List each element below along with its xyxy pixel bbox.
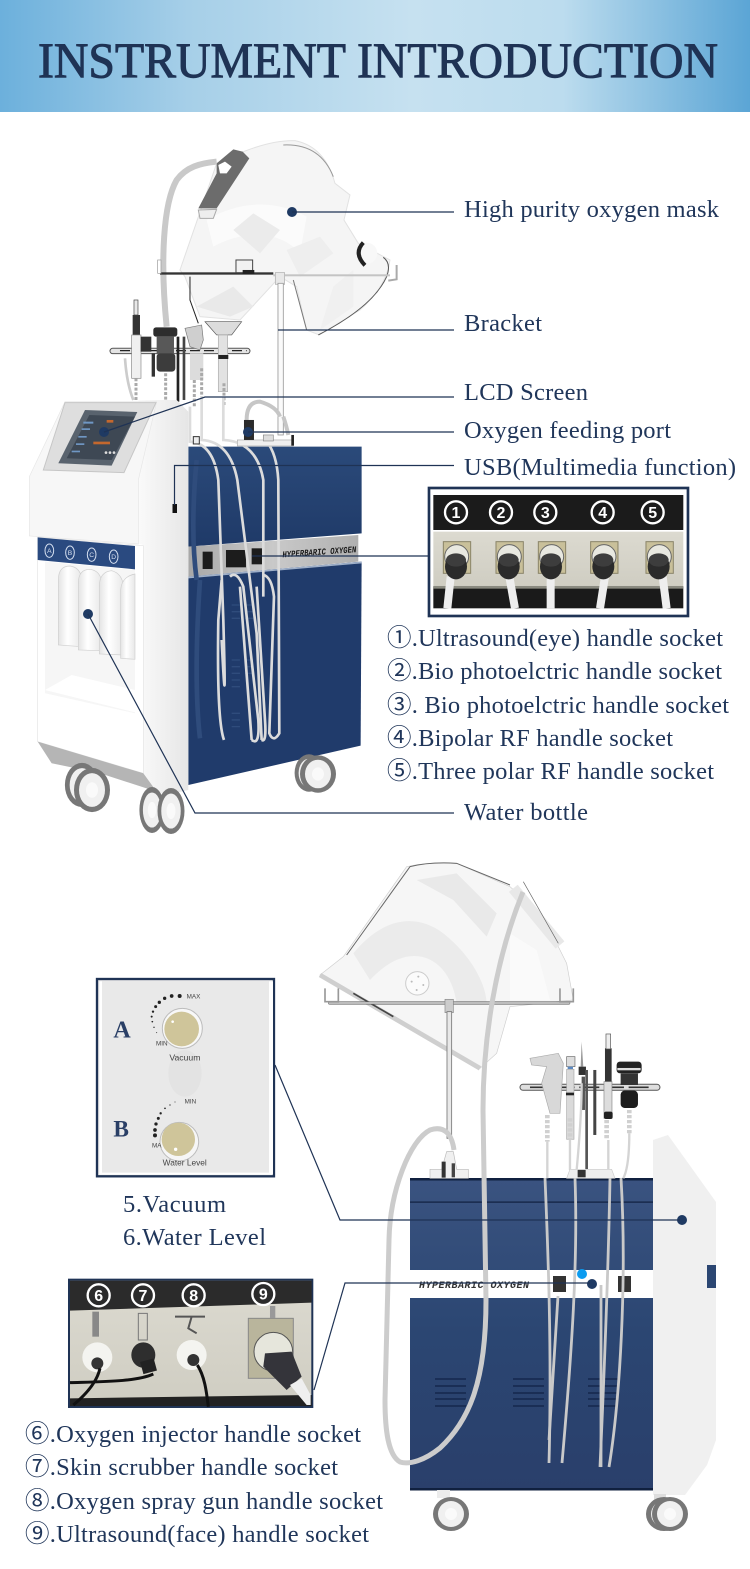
label: bracket: Bracket <box>464 310 542 337</box>
socket list 6 to 9 <box>25 1420 383 1548</box>
large oxygen tube <box>385 892 523 1463</box>
white side panel <box>653 1135 716 1495</box>
inset photo: knobs A and B: MIN <box>185 1098 197 1105</box>
cable strain reliefs <box>547 1110 629 1142</box>
title: INSTRUMENT INTRODUCTION <box>38 32 718 88</box>
label: LCD screen: LCD Screen <box>464 379 588 406</box>
bracket rack and post <box>325 988 573 1138</box>
navy A B C D strip: B <box>68 550 73 557</box>
leader: rear sockets to inset <box>314 1279 597 1390</box>
LCD touch screen <box>43 403 156 473</box>
casters <box>65 754 336 834</box>
label: water bottle: Water bottle <box>464 799 588 826</box>
inset photo: sockets 1 to 5: 5 <box>648 505 657 522</box>
leader: high purity oxygen mask <box>287 207 454 217</box>
leader: bracket <box>278 329 454 331</box>
printed cabinet lettering: HYPERBARIC OXYGEN <box>282 545 357 560</box>
socket 1: ①.Ultrasound(eye) handle socket <box>387 624 723 652</box>
caption: water level: 6.Water Level <box>123 1224 266 1251</box>
inset photo: knobs A and B: Vacuum <box>169 1053 200 1063</box>
machine: front three-quarter view <box>29 141 397 834</box>
oxygen mask dome <box>163 141 390 335</box>
label: oxygen feeding port: Oxygen feeding port <box>464 417 671 444</box>
indicator: light blue dot <box>577 1269 587 1279</box>
leader: LCD screen <box>99 397 454 437</box>
machine: rear view <box>320 863 716 1531</box>
cables hanging over cabinet <box>190 397 279 741</box>
letter B: B <box>113 1117 129 1143</box>
inset photo: knobs A and B: MA <box>152 1142 162 1149</box>
inset photo: sockets 6 to 9: 6 <box>94 1288 103 1305</box>
label: high purity oxygen mask: High purity oxygen mask <box>464 196 720 223</box>
leader: oxygen feeding port <box>243 427 454 437</box>
socket 3: ③. Bio photoelctric handle socket <box>387 691 729 719</box>
inset photo: sockets 1 to 5: 1 <box>452 505 461 522</box>
inset photo: sockets 6 to 9: 9 <box>259 1287 268 1304</box>
caption: vacuum: 5.Vacuum <box>123 1191 226 1218</box>
letter A: A <box>113 1018 131 1044</box>
socket 7: ⑦.Skin scrubber handle socket <box>25 1453 338 1481</box>
inset photo: sockets 1 to 5: 4 <box>598 505 607 522</box>
socket 2: ②.Bio photoelctric handle socket <box>387 657 722 685</box>
inset photo: sockets 1 to 5 <box>429 488 688 616</box>
navy A B C D strip: C <box>89 552 94 559</box>
navy A B C D strip: A <box>47 548 52 555</box>
leader: sockets <box>252 555 430 557</box>
cable springs <box>136 368 224 407</box>
socket 9: ⑨.Ultrasound(face) handle socket <box>25 1520 369 1548</box>
leader: USB port <box>172 466 454 513</box>
label: USB: USB(Multimedia function) <box>464 454 736 481</box>
inset photo: knobs A and B: MAX <box>187 993 201 1000</box>
inset photo: knobs A and B <box>97 979 274 1176</box>
socket 5: ⑤.Three polar RF handle socket <box>387 757 714 785</box>
blue cabinet <box>410 1178 653 1490</box>
navy A B C D strip: D <box>111 554 116 561</box>
printed cabinet lettering: HYPERBARIC OXYGEN <box>419 1281 530 1292</box>
blue cabinet panels <box>188 447 362 785</box>
socket 6: ⑥.Oxygen injector handle socket <box>25 1420 361 1448</box>
oxygen feeding port fitting <box>193 420 294 446</box>
inset photo: sockets 6 to 9: 7 <box>139 1288 148 1305</box>
casters <box>433 1490 688 1531</box>
inset photo: sockets 1 to 5: 2 <box>497 505 506 522</box>
oxygen port fitting <box>430 1152 468 1178</box>
leader: water bottle <box>83 609 454 813</box>
leader: rear panel to knob inset <box>275 1065 687 1225</box>
socket list 1 to 5 <box>387 624 729 785</box>
socket 4: ④.Bipolar RF handle socket <box>387 724 673 752</box>
water bottles <box>58 566 135 659</box>
header banner <box>0 0 750 112</box>
inset photo: knobs A and B: MIN <box>156 1041 168 1048</box>
handpiece tool rack <box>110 300 250 407</box>
oxygen mask dome <box>320 863 573 1068</box>
inset photo: sockets 6 to 9: 8 <box>189 1288 198 1305</box>
knob captions <box>123 1191 266 1251</box>
navy A B C D strip <box>38 537 135 569</box>
cables over cabinet <box>545 1178 623 1467</box>
bracket rack and post <box>158 260 397 435</box>
inset photo: sockets 1 to 5: 3 <box>541 505 550 522</box>
inset photo: sockets 6 to 9 <box>69 1280 312 1407</box>
socket 8: ⑧.Oxygen spray gun handle socket <box>25 1487 383 1515</box>
inset photo: knobs A and B: Water Level <box>163 1157 207 1167</box>
handpiece tool rack <box>520 1034 660 1178</box>
white front body <box>29 400 188 795</box>
